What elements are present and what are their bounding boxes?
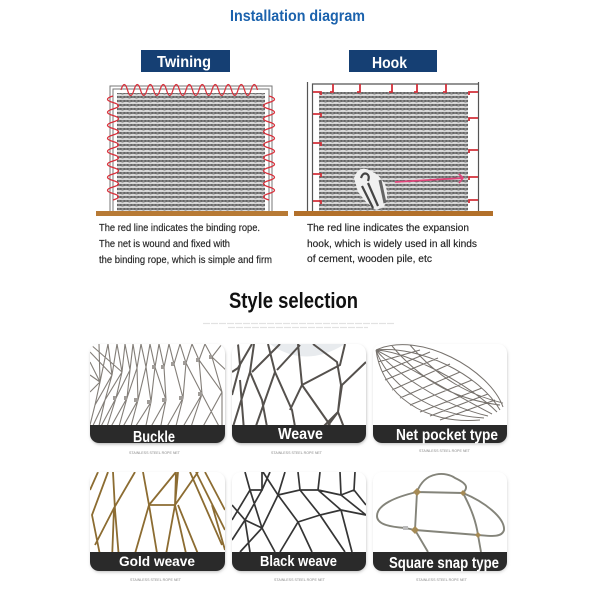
text: twining description: the binding rope, which is simple and firm — [99, 254, 272, 266]
arrow: pointing at hook — [395, 174, 463, 183]
heading: Style selection: Style selection — [229, 288, 358, 313]
panel: hook diagram — [294, 50, 493, 265]
card: Weave — [232, 344, 366, 444]
card: Square snap type: Square snap type — [389, 555, 499, 572]
caption: STAINLESS STEEL ROPE NET — [271, 451, 323, 455]
panel: twining diagram — [96, 50, 288, 266]
heading: Twining: Twining — [157, 54, 211, 71]
diagram: net wound with red binding rope — [108, 84, 274, 211]
card: Buckle: Buckle — [133, 429, 175, 446]
card: Gold weave: Gold weave — [119, 553, 195, 569]
card: Net pocket type: Net pocket type — [396, 427, 498, 444]
title: Installation diagram: Installation diagram — [230, 8, 365, 25]
card: Buckle — [90, 344, 228, 446]
caption: STAINLESS STEEL ROPE NET — [419, 449, 471, 453]
text: twining description — [99, 222, 272, 266]
card: Net pocket type — [373, 344, 507, 444]
heading: Hook — [349, 50, 437, 72]
heading: Twining — [141, 50, 230, 72]
caption: STAINLESS STEEL ROPE NET — [130, 578, 182, 582]
card: Black weave — [232, 472, 366, 572]
caption: STAINLESS STEEL ROPE NET — [129, 451, 181, 455]
heading: Hook: Hook — [372, 55, 407, 72]
caption: STAINLESS STEEL ROPE NET — [274, 578, 326, 582]
diagram: net fixed with expansion hooks — [308, 82, 478, 211]
text: hook description: hook, which is widely used in all kinds — [307, 238, 477, 250]
text: hook description: The red line indicates the expansion — [307, 222, 469, 234]
text: hook description — [307, 222, 477, 265]
text: hook description: of cement, wooden pile, etc — [307, 253, 432, 265]
text: twining description: The red line indicates the binding rope. — [99, 222, 260, 234]
card: Square snap type — [373, 472, 507, 572]
ground — [96, 211, 288, 216]
card: Weave: Weave — [278, 426, 323, 443]
text: twining description: The net is wound and fixed with — [99, 238, 230, 250]
ground — [294, 211, 493, 216]
caption: STAINLESS STEEL ROPE NET — [416, 578, 468, 582]
icon: expansion hook clamp — [354, 169, 387, 210]
card: Black weave: Black weave — [260, 553, 337, 570]
card: Gold weave — [90, 472, 225, 572]
